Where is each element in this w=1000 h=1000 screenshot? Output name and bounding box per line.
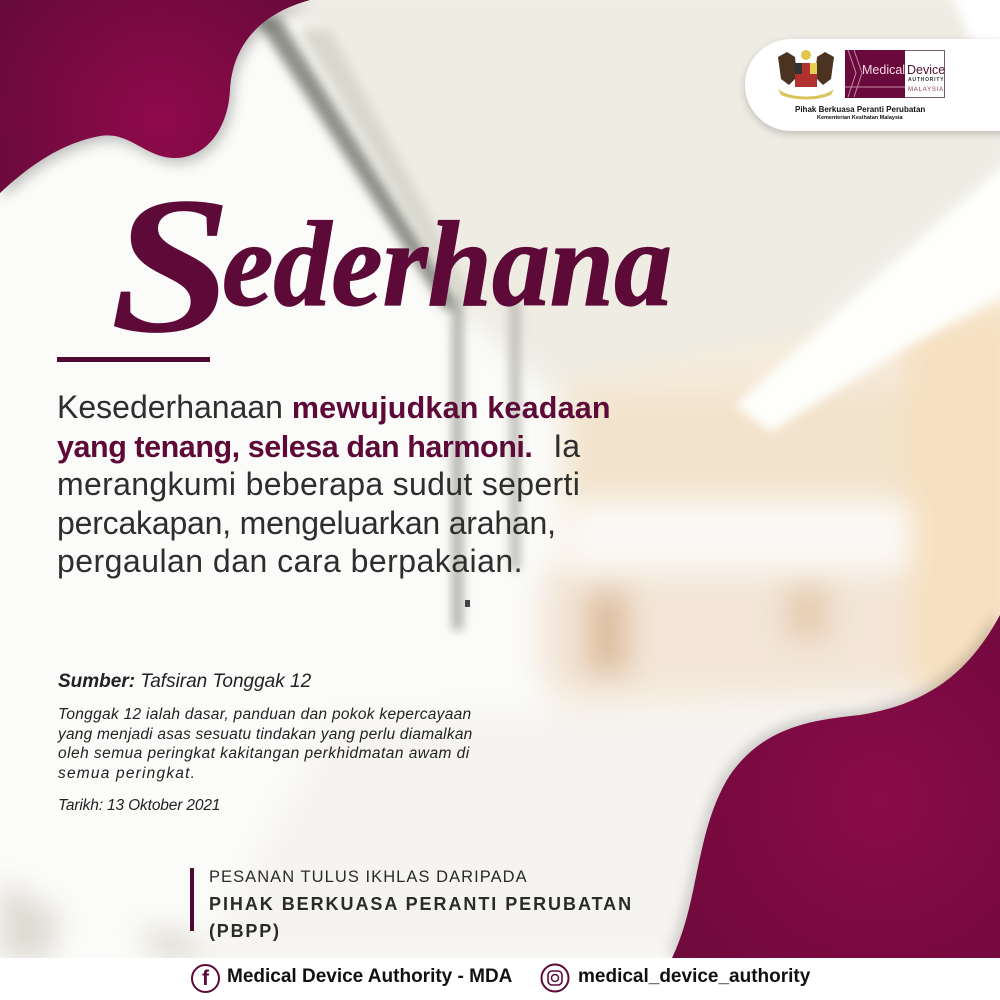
logo: Medical Device Authority: MALAYSIA xyxy=(908,87,944,93)
source description: yang menjadi asas sesuatu tindakan yang perlu diamalkan xyxy=(58,726,472,743)
intro paragraph: yang tenang, selesa dan harmoni. Ia xyxy=(57,428,580,464)
logo: Medical Device Authority: AUTHORITY xyxy=(908,77,944,83)
message text: PIHAK BERKUASA PERANTI PERUBATAN xyxy=(209,894,633,914)
message text: (PBPP) xyxy=(209,921,281,941)
message text: PESANAN TULUS IKHLAS DARIPADA xyxy=(209,868,528,886)
intro paragraph: percakapan, mengeluarkan arahan, xyxy=(57,505,556,541)
intro paragraph xyxy=(57,389,611,579)
source description: oleh semua peringkat kakitangan perkhidmatan awam di xyxy=(58,745,470,762)
source block: Sumber: Tafsiran Tonggak 12 xyxy=(58,671,311,692)
title underline xyxy=(57,357,210,362)
instagram label: medical_device_authority xyxy=(578,966,810,987)
intro paragraph: pergaulan dan cara berpakaian. xyxy=(57,543,523,579)
logo caption: Pihak Berkuasa Peranti Perubatan xyxy=(795,105,925,114)
bottom-right maroon wave xyxy=(669,612,1000,958)
source description: semua peringkat. xyxy=(58,765,196,782)
message text xyxy=(209,868,633,941)
icon: coat of arms xyxy=(778,50,834,100)
logo: Medical Device Authority xyxy=(845,50,945,98)
icon: facebook: f xyxy=(202,967,209,990)
source description xyxy=(57,706,472,782)
title: ederhana xyxy=(222,197,672,332)
facebook label: Medical Device Authority - MDA xyxy=(227,966,512,987)
title: S xyxy=(110,157,232,374)
logo pill xyxy=(745,39,1000,131)
intro paragraph: Kesederhanaan mewujudkan keadaan xyxy=(57,389,611,425)
intro paragraph: merangkumi beberapa sudut seperti xyxy=(57,466,580,502)
date: Tarikh: 13 Oktober 2021 xyxy=(58,797,220,814)
logo: Medical Device Authority: Medical xyxy=(862,63,905,77)
logo: Medical Device Authority: Device xyxy=(907,63,945,77)
icon: instagram xyxy=(540,964,570,992)
footer bar xyxy=(0,958,1000,1000)
icon: facebook xyxy=(191,964,220,993)
source description: Tonggak 12 ialah dasar, panduan dan pokok kepercayaan xyxy=(58,706,471,723)
logo pill: Kementerian Kesihatan Malaysia xyxy=(817,115,903,121)
stray mark xyxy=(465,600,470,607)
message bar xyxy=(190,868,194,931)
